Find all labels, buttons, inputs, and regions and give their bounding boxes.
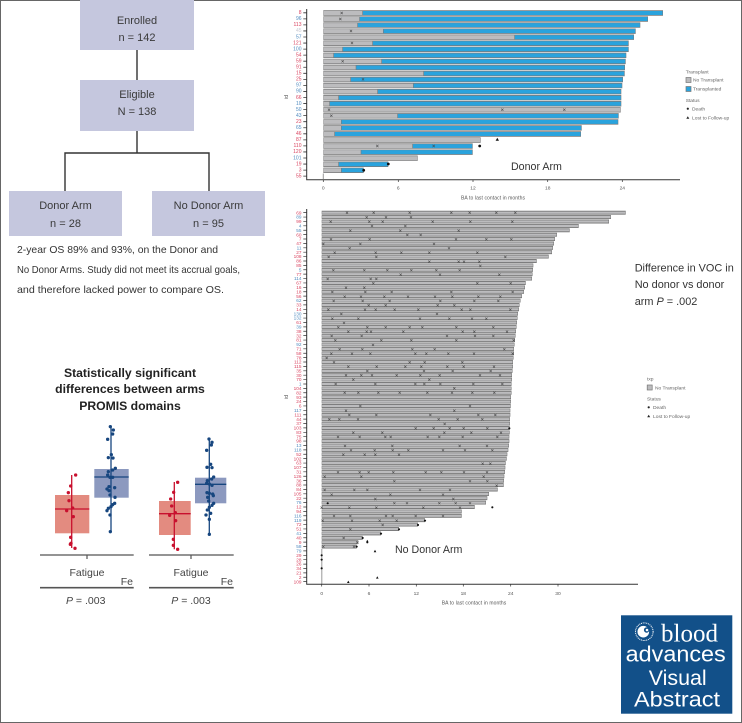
overall survival text: 2-year OS 89% and 93%, on the Donor and (17, 245, 218, 256)
legend: no donor arm: No Transplant (655, 386, 686, 392)
bars: donor arm outlines (323, 13, 663, 170)
overall survival text (17, 245, 240, 296)
y axis: 92 (296, 342, 302, 347)
y axis: 2 (299, 575, 302, 580)
y axis: 119 (294, 518, 302, 523)
y axis: 37 (296, 421, 302, 426)
legend: no donor arm: Status (647, 396, 661, 402)
y axis: 3 (299, 167, 302, 173)
y axis: 99 (296, 219, 302, 224)
y axis: 25 (296, 77, 302, 83)
y axis: 120 (293, 149, 302, 155)
y axis: 29 (296, 553, 302, 558)
legend: no donor arm: txp (647, 376, 654, 382)
y axis: 16 (296, 285, 302, 290)
box: enrolled: n = 142 (118, 32, 156, 44)
y axis: 19 (296, 161, 302, 167)
lost to follow-up markers (347, 540, 379, 583)
y axis: 55 (296, 173, 302, 179)
x axis labels (320, 591, 561, 606)
x axis labels: BA to last contact in months (442, 600, 507, 606)
y axis: 62 (296, 298, 302, 303)
y axis: 117 (294, 408, 302, 413)
y axis (284, 9, 680, 182)
y axis: 113 (294, 22, 302, 28)
box: donor arm: n = 28 (50, 218, 81, 230)
logo: blood advances visual abstract: Visual (649, 666, 707, 690)
x axis labels: 24 (508, 591, 514, 597)
x axis labels: 12 (414, 591, 419, 597)
plot: left fatigue box plot: Fe (121, 576, 133, 588)
box: no donor arm: n = 95 (193, 218, 224, 230)
y axis: 71 (296, 346, 302, 351)
plot: right fatigue box plot (149, 437, 234, 607)
heading: PROMIS domains: differences between arms (55, 382, 205, 396)
y axis: 11 (297, 245, 302, 250)
y axis: 76 (296, 500, 302, 505)
y axis: 87 (296, 137, 302, 143)
y axis: 26 (296, 562, 302, 567)
y axis: 94 (296, 509, 302, 514)
y axis: 130 (294, 311, 302, 316)
bars: no transplant fill (322, 213, 625, 547)
y axis: 63 (296, 461, 302, 466)
box: no donor arm (152, 191, 265, 236)
y axis: 1 (299, 382, 302, 387)
y axis: 85 (296, 263, 302, 268)
y axis: 98 (296, 439, 302, 444)
y axis: 107 (294, 465, 302, 470)
y axis: 46 (296, 131, 302, 137)
y axis: 40 (296, 535, 302, 540)
death markers (322, 428, 509, 568)
y axis: 10 (296, 101, 302, 107)
y axis: 86 (296, 259, 302, 264)
overall survival text: No Donor Arms. Study did not meet its accrual goals, (17, 265, 240, 276)
legend: no donor arm: Lost to Follow-up (653, 414, 691, 420)
box: enrolled: Enrolled (117, 15, 157, 27)
y axis: 108 (294, 254, 302, 259)
y axis: 34 (296, 566, 302, 571)
plot: right fatigue box plot: Fe (221, 576, 233, 588)
y axis: 97 (296, 83, 302, 89)
x axis labels: 12 (470, 186, 476, 192)
legend: donor arm (686, 70, 730, 122)
x axis labels: BA to last contact in months (461, 196, 526, 202)
y axis: 82 (296, 390, 302, 395)
y axis: 78 (296, 355, 302, 360)
label: donor arm: Donor Arm (511, 161, 562, 173)
x axis labels: 0 (320, 591, 323, 597)
y axis: 6 (299, 404, 302, 409)
y axis: 24 (296, 399, 302, 404)
icon: blood logo mark (636, 623, 653, 640)
plot: left fatigue box plot (40, 425, 134, 607)
y axis: 132 (294, 316, 302, 321)
box: donor arm: Donor Arm (39, 200, 92, 212)
y axis: 54 (296, 52, 302, 58)
y axis: 9 (299, 540, 302, 545)
y axis: 103 (294, 426, 302, 431)
y axis: 35 (296, 368, 302, 373)
callout: VOC difference: No donor vs donor (635, 279, 725, 291)
bars: no transplant segments (324, 13, 620, 170)
x axis labels: 6 (368, 591, 371, 597)
y axis: 31 (296, 469, 302, 474)
y axis: 81 (296, 338, 302, 343)
callout: VOC difference (635, 263, 734, 308)
y axis: 83 (296, 430, 302, 435)
y axis: 15 (296, 71, 302, 77)
y axis: 70 (296, 377, 302, 382)
y axis: 4 (299, 223, 302, 228)
legend: donor arm: Transplant (686, 70, 709, 76)
y axis: 67 (296, 281, 302, 286)
callout: VOC difference: arm P = .002 (635, 296, 697, 308)
y axis: 8 (299, 10, 302, 16)
y axis: 109 (294, 579, 302, 584)
crossover marks (329, 13, 564, 146)
x axis labels: 30 (555, 591, 561, 597)
y axis: 104 (294, 386, 302, 391)
x axis labels: 6 (397, 186, 400, 192)
legend: donor arm: No Transplant (693, 78, 724, 84)
y axis: 58 (296, 544, 302, 549)
y axis: 51 (296, 527, 302, 532)
y axis: 111 (294, 412, 302, 417)
y axis: id (284, 95, 290, 99)
chart: no donor arm swimmer plot (284, 209, 691, 606)
y axis: 52 (296, 452, 302, 457)
x axis labels: 18 (545, 186, 551, 192)
plot: right fatigue box plot: P = .003 (171, 595, 211, 607)
box: eligible (80, 80, 194, 131)
y axis: 72 (296, 522, 302, 527)
y axis: 57 (296, 34, 302, 40)
y axis: 79 (296, 549, 302, 554)
y axis: 27 (296, 250, 302, 255)
y axis: 21 (296, 571, 302, 576)
box plots (40, 425, 234, 607)
y axis: 65 (296, 125, 302, 131)
y axis: 22 (296, 496, 302, 501)
y axis: 61 (296, 320, 302, 325)
y axis: 90 (296, 89, 302, 95)
plot: left fatigue box plot: Fatigue (69, 567, 105, 579)
y axis: 121 (293, 40, 302, 46)
logo: blood advances visual abstract: blood (661, 621, 718, 648)
y axis: 91 (296, 64, 302, 70)
legend: donor arm: Status (686, 98, 700, 104)
y axis: 69 (296, 210, 302, 215)
box: enrolled (80, 0, 194, 50)
y axis: 101 (293, 155, 302, 161)
legend: no donor arm: Death (653, 405, 666, 411)
y axis: 59 (296, 58, 302, 64)
y axis: 112 (294, 360, 302, 365)
y axis: 110 (294, 143, 302, 149)
logo: blood advances visual abstract (621, 615, 732, 714)
callout: VOC difference: Difference in VOC in (635, 263, 734, 275)
y axis: 36 (296, 478, 302, 483)
legend: no donor arm (647, 376, 691, 420)
y axis: 60 (296, 232, 302, 237)
flow diagram (9, 0, 265, 236)
y axis: id (284, 395, 290, 399)
y axis: 39 (296, 325, 302, 330)
box: no donor arm: No Donor Arm (174, 200, 243, 212)
y axis: 18 (296, 289, 302, 294)
y axis (284, 209, 638, 586)
y axis: 115 (294, 364, 302, 369)
y axis: 116 (294, 513, 302, 518)
box: eligible: Eligible (119, 89, 155, 101)
plot: right fatigue box plot: Fatigue (173, 567, 209, 579)
label: no donor arm: No Donor Arm (395, 544, 463, 556)
zero-length row (322, 174, 324, 179)
bars: outlines (322, 213, 626, 547)
y axis: 50 (296, 107, 302, 113)
y axis: 66 (296, 95, 302, 101)
connector lines (65, 49, 209, 191)
y axis: 56 (296, 294, 302, 299)
bars: transplanted segments (330, 13, 662, 170)
death and follow-up markers (362, 138, 499, 172)
y axis: 96 (296, 16, 302, 22)
crossover marks (322, 213, 515, 547)
y axis: 105 (294, 491, 302, 496)
y axis: 58 (296, 351, 302, 356)
plot: left fatigue box plot: P = .003 (66, 595, 106, 607)
heading: PROMIS domains: PROMIS domains (79, 399, 181, 413)
y axis: 88 (296, 483, 302, 488)
y axis: 14 (296, 307, 302, 312)
y axis: 12 (296, 505, 302, 510)
y axis: 30 (296, 373, 302, 378)
y axis: 32 (296, 333, 302, 338)
y axis: 102 (294, 456, 302, 461)
y axis: 75 (296, 434, 302, 439)
y axis: 5 (299, 267, 302, 272)
y axis: 93 (296, 395, 302, 400)
y axis: 84 (296, 487, 302, 492)
y axis: 55 (296, 228, 302, 233)
y axis: 23 (296, 119, 302, 125)
legend: donor arm: Lost to Follow-up (692, 116, 730, 122)
y axis: 114 (294, 276, 302, 281)
y axis: 43 (296, 113, 302, 119)
y axis: 38 (296, 329, 302, 334)
legend: donor arm: Death (692, 106, 705, 112)
y axis: 89 (296, 215, 302, 220)
box: donor arm (9, 191, 122, 236)
x axis labels: 18 (461, 591, 466, 597)
y axis: 77 (296, 272, 302, 277)
y axis: 45 (296, 28, 302, 34)
y axis: 33 (296, 303, 302, 308)
y axis: 126 (294, 474, 302, 479)
y axis: 100 (293, 46, 302, 52)
overall survival text: and therefore lacked power to compare OS. (17, 285, 224, 296)
x axis labels (322, 186, 625, 202)
chart: donor arm swimmer plot (284, 9, 730, 202)
logo: blood advances visual abstract: Abstract (634, 688, 720, 712)
zero-length rows (321, 549, 323, 584)
box: eligible: N = 138 (118, 106, 156, 118)
y axis: 118 (294, 448, 302, 453)
y axis: 13 (296, 443, 302, 448)
y axis: 7 (299, 237, 302, 242)
heading: PROMIS domains (55, 366, 205, 413)
legend: donor arm: Transplanted (693, 87, 722, 93)
logo: blood advances visual abstract: advances (626, 641, 726, 666)
y axis: 41 (296, 531, 302, 536)
heading: PROMIS domains: Statistically significant (64, 366, 196, 380)
x axis labels: 0 (322, 186, 325, 192)
y axis: 47 (296, 241, 302, 246)
y axis: 44 (296, 417, 302, 422)
x axis labels: 24 (620, 186, 625, 192)
y axis: 28 (296, 557, 302, 562)
